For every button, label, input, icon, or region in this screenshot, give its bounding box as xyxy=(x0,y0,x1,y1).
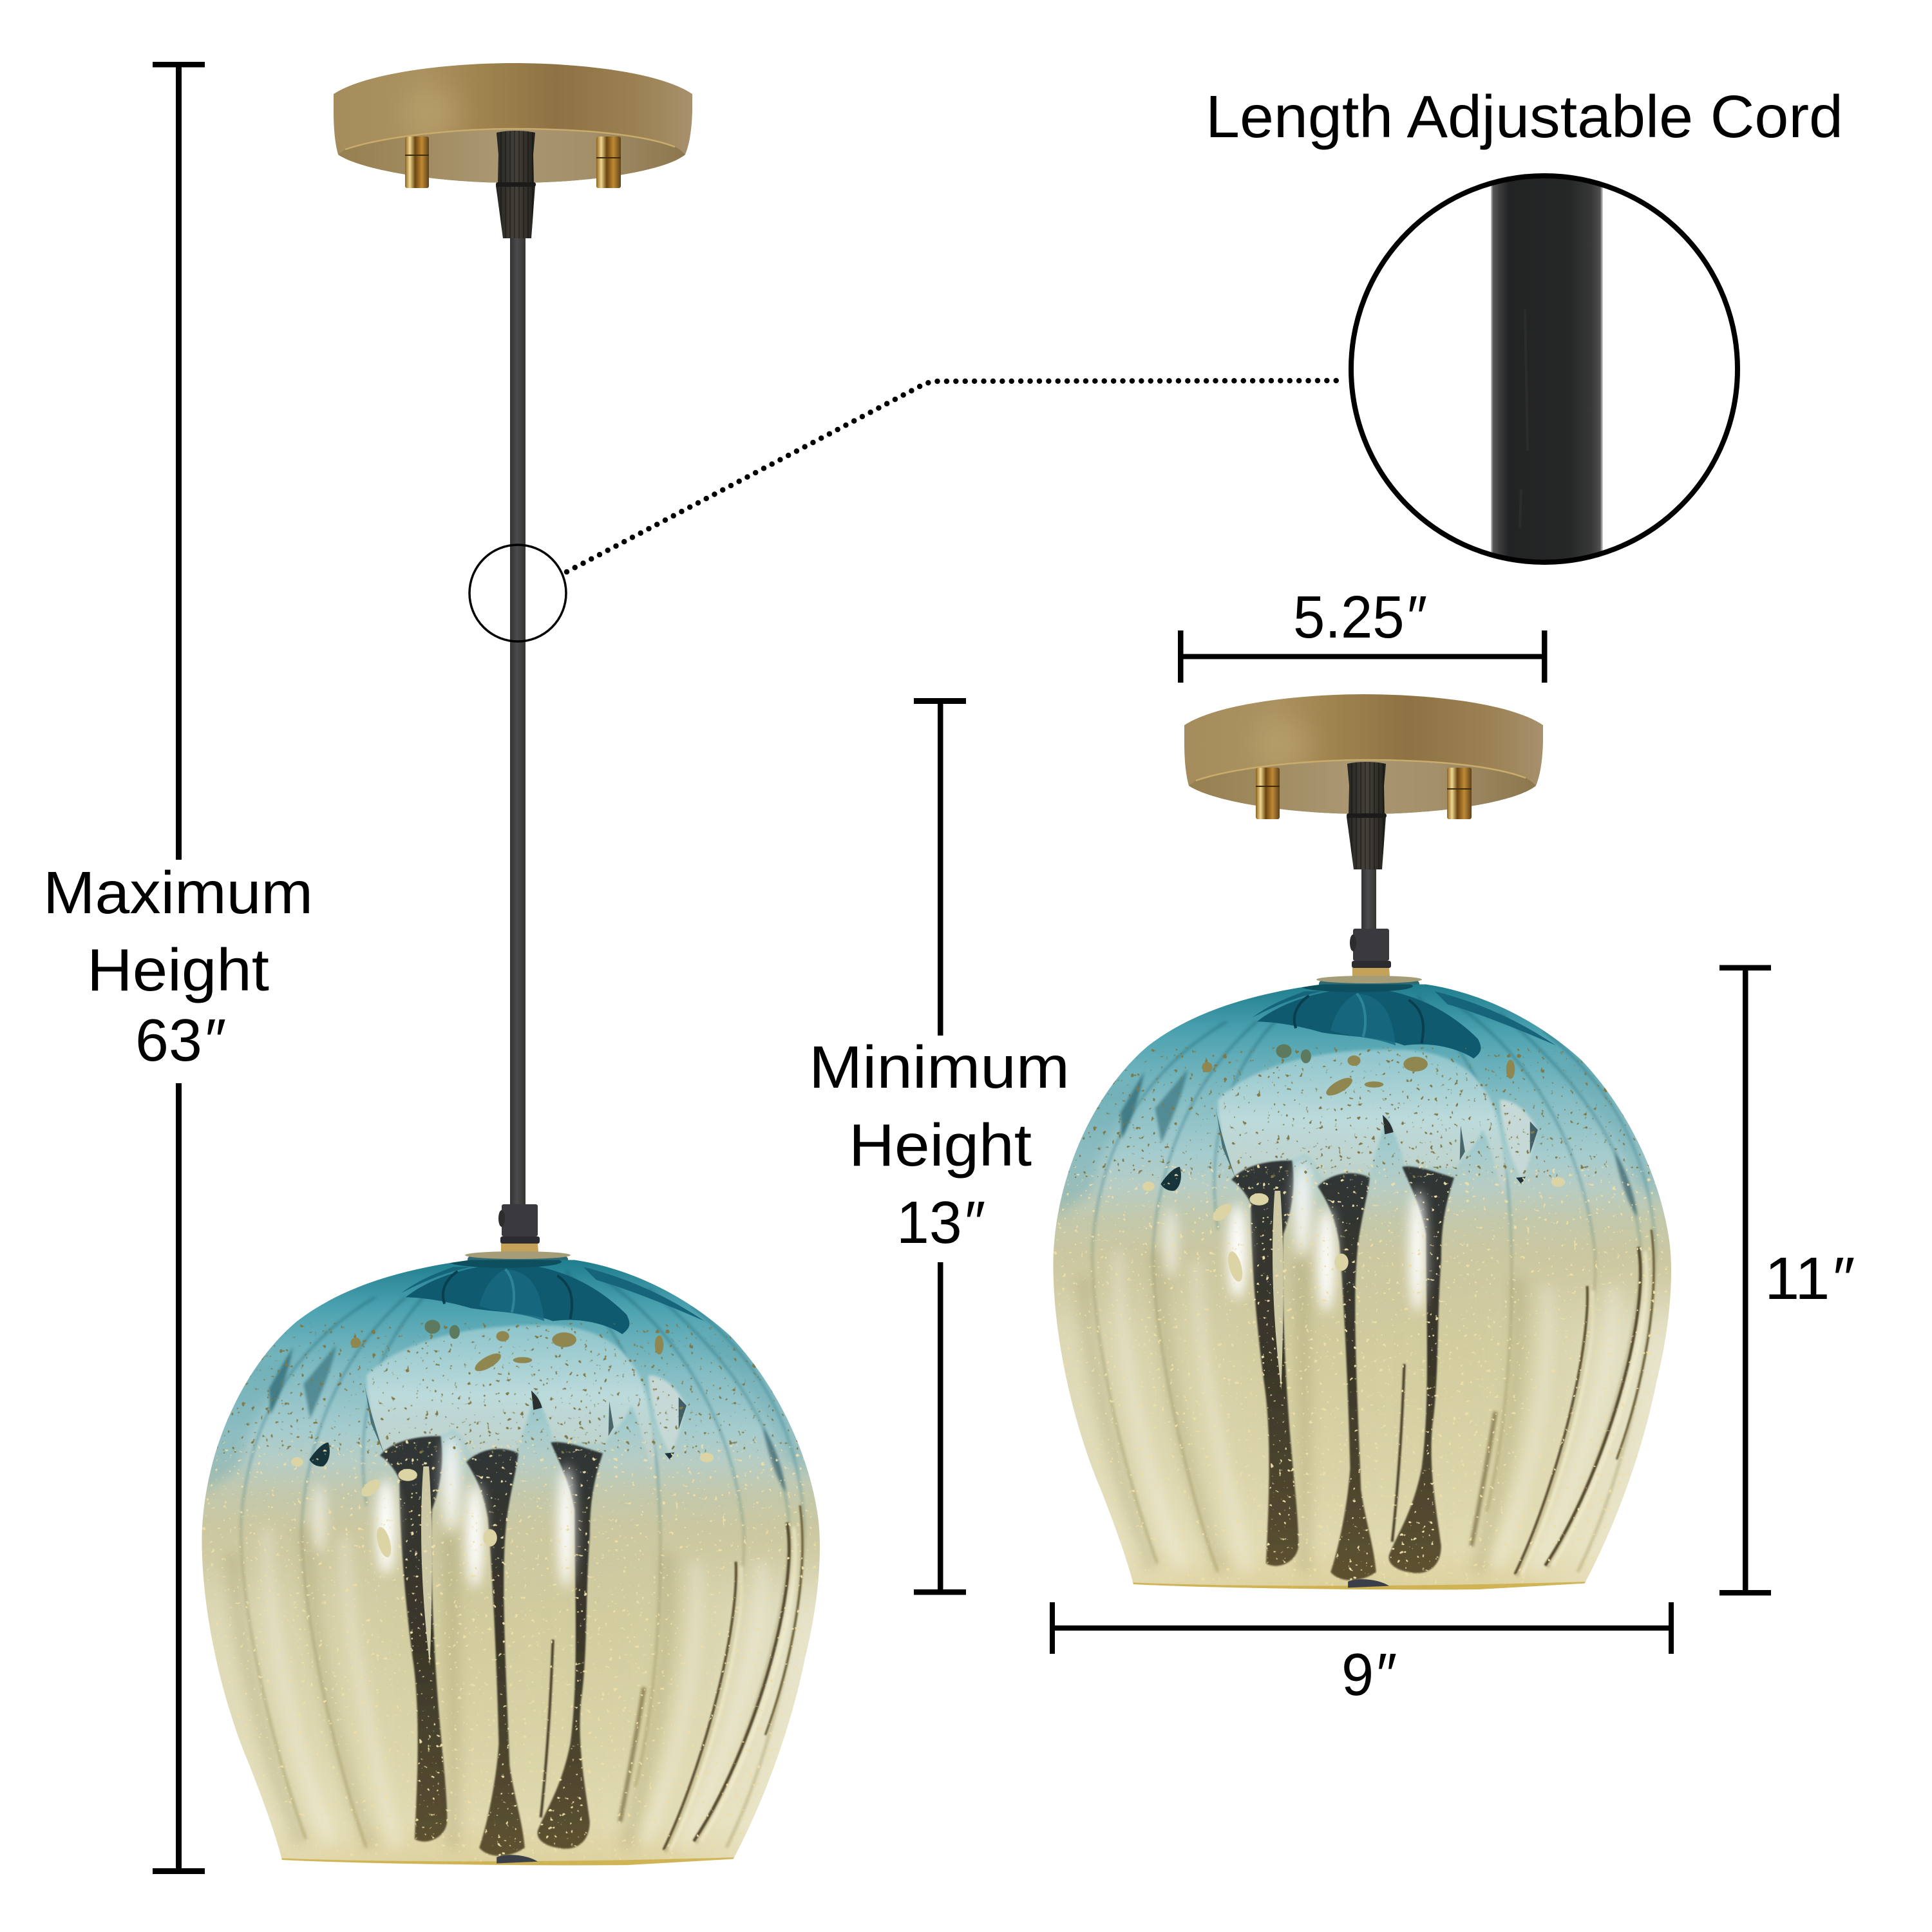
minimum height label: Height xyxy=(849,1112,1032,1179)
maximum height label: 63″ xyxy=(135,1007,225,1074)
maximum height label: Maximum xyxy=(43,859,313,926)
cord fitting xyxy=(465,1204,571,1265)
minimum height label: Minimum xyxy=(809,1034,1070,1101)
glass shade xyxy=(1019,974,1712,1694)
shade width dimension line xyxy=(1050,1602,1674,1654)
minimum-length pendant lamp xyxy=(1019,694,1712,1694)
shade width label: 9″ xyxy=(1341,1641,1396,1708)
magnifier ring xyxy=(1351,176,1738,562)
canopy width label: 5.25″ xyxy=(1293,583,1426,650)
shade height dimension line xyxy=(1719,965,1771,1596)
shade height label: 11″ xyxy=(1765,1245,1854,1312)
short lamp cord xyxy=(1361,866,1376,931)
minimum height dimension line xyxy=(914,698,966,1595)
maximum height label xyxy=(43,859,313,1074)
magnified cord xyxy=(1491,171,1603,570)
lamp cord xyxy=(510,235,526,1206)
canopy width dimension xyxy=(1178,630,1547,683)
glass shade xyxy=(167,1249,860,1932)
dotted leader line to detail xyxy=(567,381,1338,572)
maximum-length pendant lamp xyxy=(167,63,860,1932)
minimum height label: 13″ xyxy=(896,1189,985,1256)
ceiling canopy xyxy=(1184,694,1543,869)
maximum height label: Height xyxy=(87,936,269,1003)
minimum height label xyxy=(809,1034,1070,1256)
detail title: Length Adjustable Cord xyxy=(1206,83,1843,150)
detail marker circle on cord xyxy=(469,545,566,641)
ceiling canopy xyxy=(334,63,692,238)
cord fitting xyxy=(1316,929,1422,989)
maximum height dimension line xyxy=(153,62,205,1874)
magnified cord detail xyxy=(1351,171,1738,570)
